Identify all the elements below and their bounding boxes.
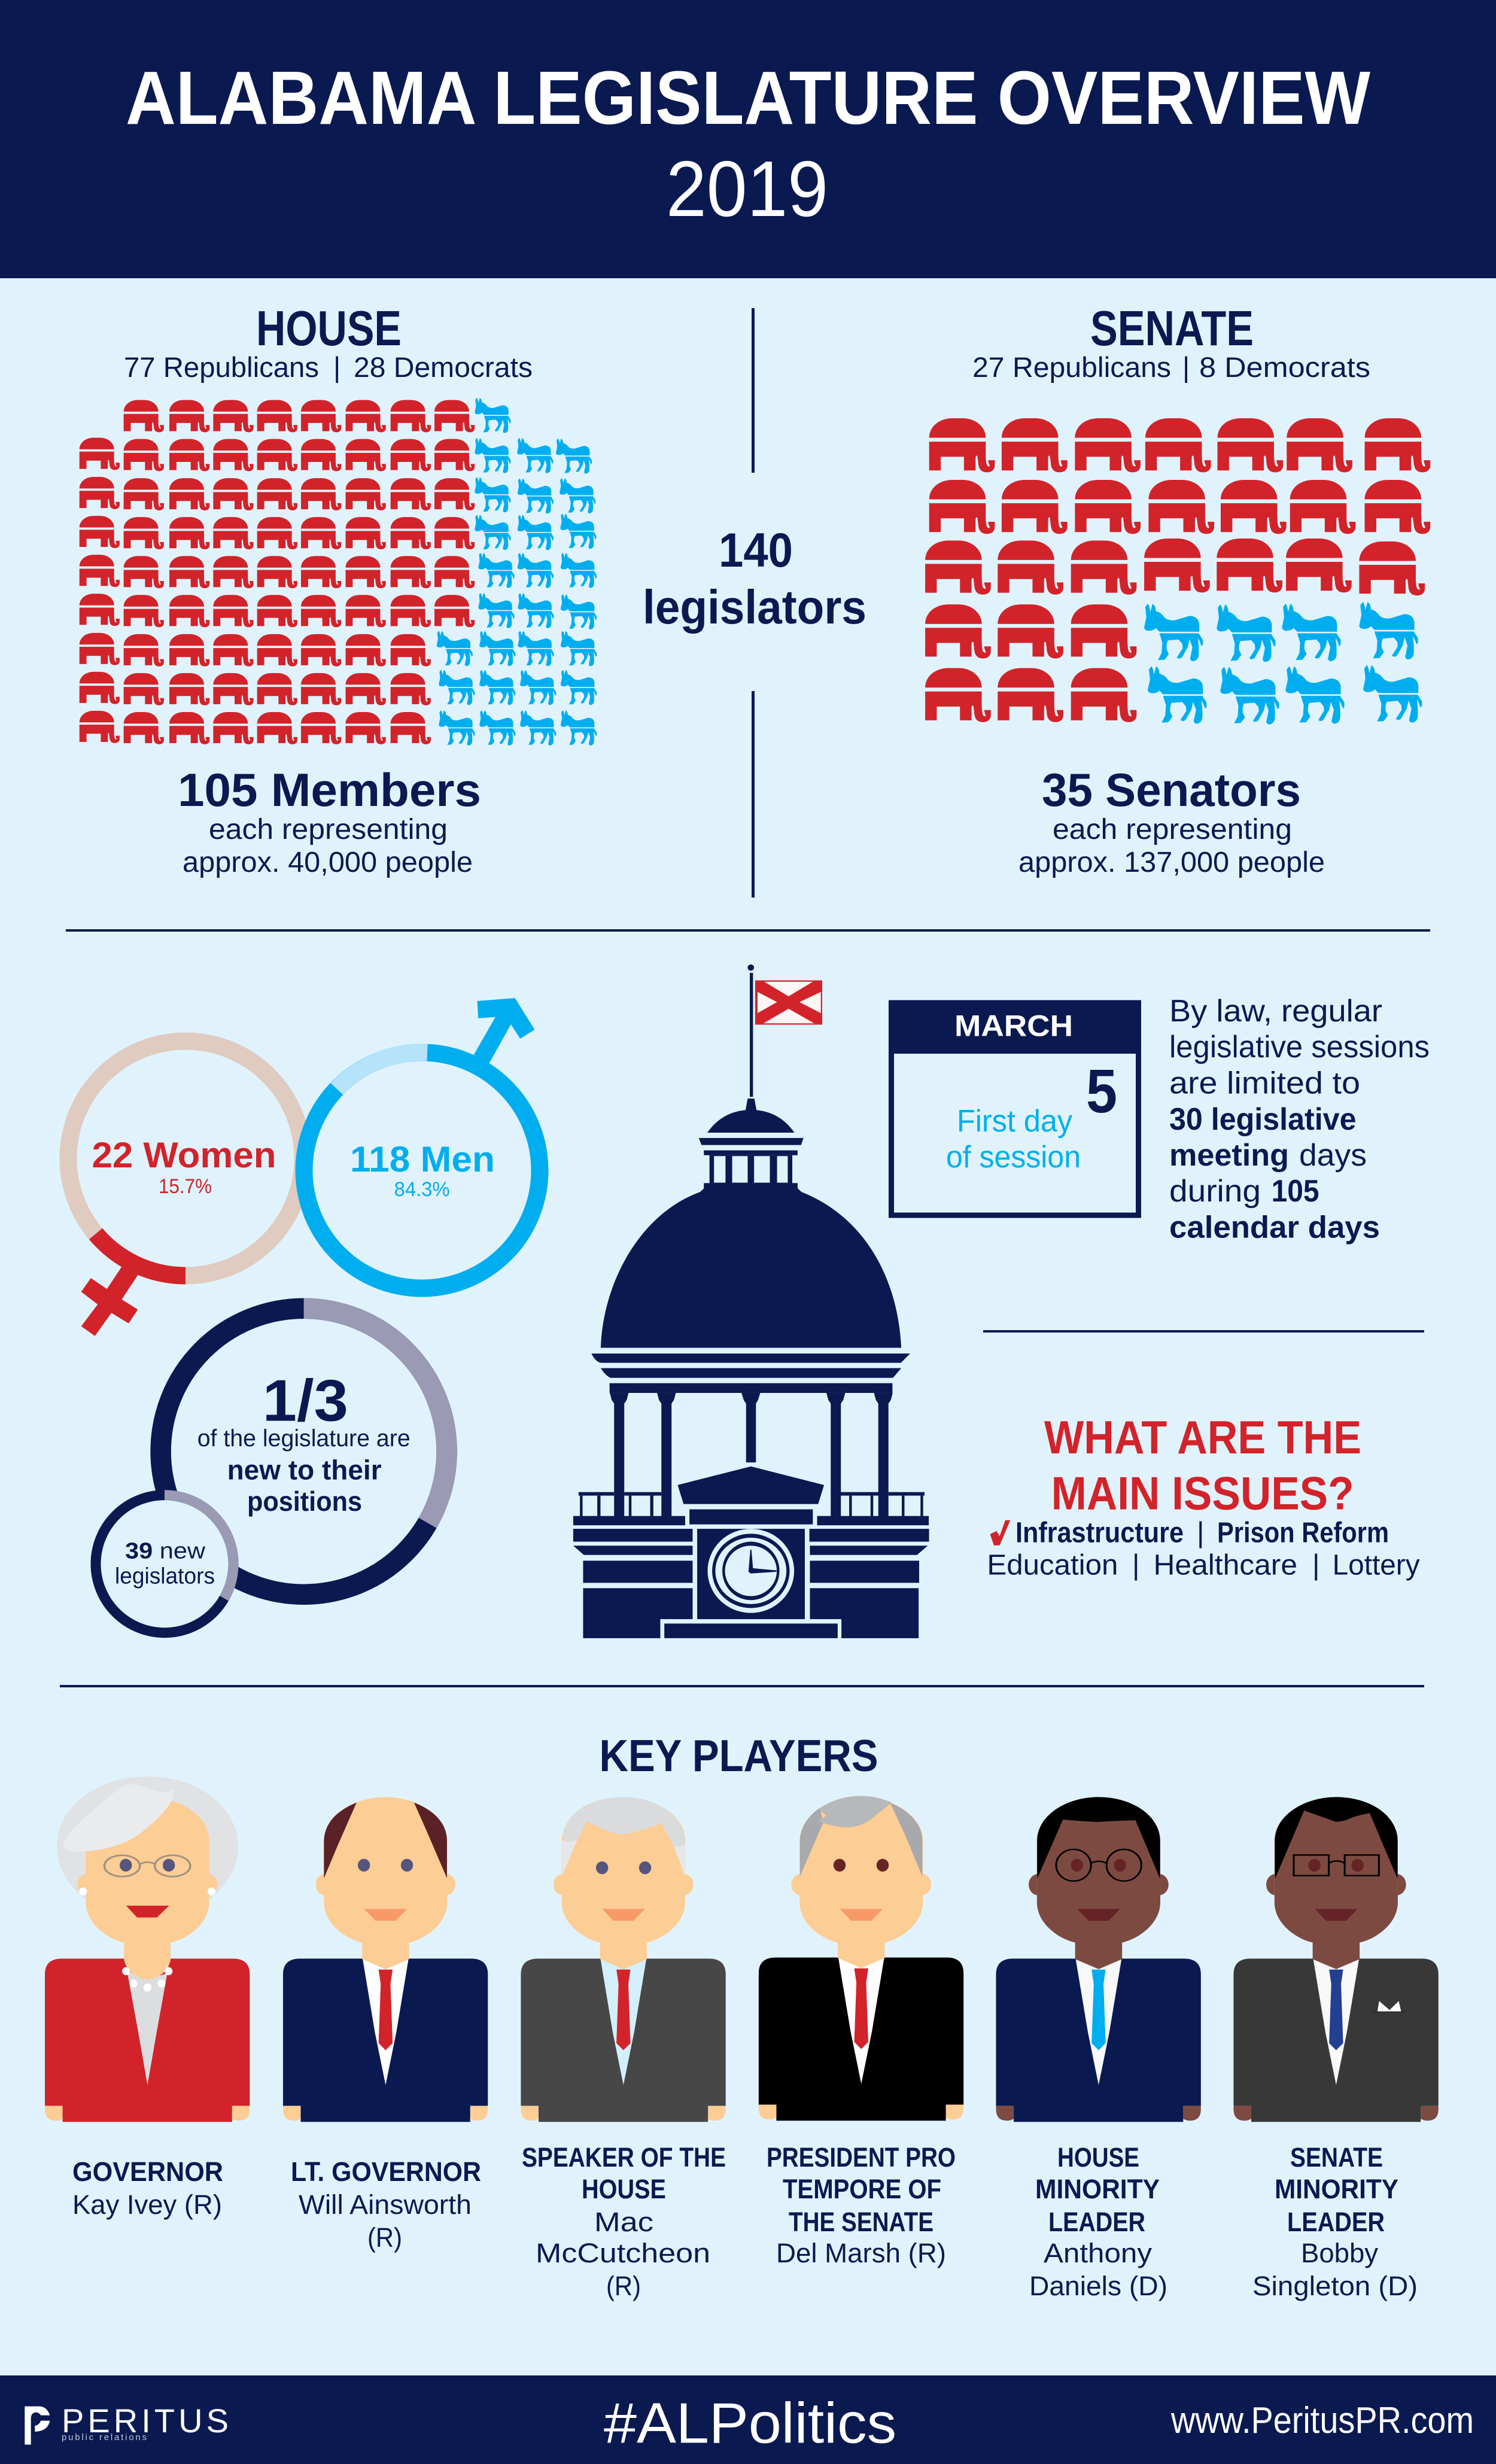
text: issues list: Prison Reform xyxy=(1217,1517,1389,1549)
year: 2019 xyxy=(666,145,828,233)
caption: lt governor: (R) xyxy=(367,2222,402,2253)
text: house members: approx. 40,000 people xyxy=(183,847,473,878)
caption: lt governor xyxy=(291,2156,481,2253)
text: one third new: of the legislature are xyxy=(197,1425,411,1452)
text: 39 new legislators xyxy=(115,1539,215,1589)
icon: capitol building xyxy=(573,965,929,1638)
caption: lt governor: Will Ainsworth xyxy=(299,2189,472,2220)
chart: men ring xyxy=(304,998,540,1288)
heading: main issues: WHAT ARE THE xyxy=(1044,1411,1361,1464)
text: session limits xyxy=(1169,994,1430,1245)
caption: speaker: SPEAKER OF THE xyxy=(522,2142,726,2173)
text: house members xyxy=(178,763,481,878)
panel: senate heading xyxy=(972,300,1370,383)
panel: house heading xyxy=(124,300,533,383)
text: session limits: during xyxy=(1169,1174,1261,1209)
text: house members: each representing xyxy=(209,814,448,845)
text: issues list: Healthcare xyxy=(1154,1550,1297,1581)
caption: house minority leader: Daniels (D) xyxy=(1029,2271,1167,2301)
caption: senate minority leader: LEADER xyxy=(1287,2207,1385,2237)
panel: house heading: HOUSE xyxy=(256,300,402,356)
caption: president pro tempore: Del Marsh (R) xyxy=(776,2238,946,2268)
figure: house minority leader anthony daniels xyxy=(996,1797,1201,2122)
text: session limits: By law, regular xyxy=(1169,994,1382,1029)
figure: president pro tempore del marsh xyxy=(759,1796,963,2121)
chart: one third ring xyxy=(161,1309,447,1595)
heading: key players: KEY PLAYERS xyxy=(600,1730,878,1781)
caption: governor: GOVERNOR xyxy=(72,2156,223,2187)
icon: female cross xyxy=(81,1267,138,1336)
text: date: 5 xyxy=(1086,1057,1117,1125)
caption: speaker xyxy=(522,2142,726,2301)
icon: peritus logo xyxy=(25,2407,50,2445)
text: session limits: legislative sessions xyxy=(1169,1030,1430,1064)
pictogram: house republicans xyxy=(80,400,475,744)
caption: speaker: HOUSE xyxy=(582,2174,666,2204)
text: first day of session: First day xyxy=(957,1104,1072,1139)
text: senators: 35 Senators xyxy=(1042,763,1301,816)
text: issues list: | xyxy=(1312,1550,1319,1581)
text: session limits: 30 legislative xyxy=(1169,1102,1356,1137)
caption: house minority leader: HOUSE xyxy=(1057,2142,1139,2173)
text: session limits: calendar days xyxy=(1169,1210,1380,1245)
pictogram: senate republicans xyxy=(925,418,1430,722)
figure: lt governor will ainsworth xyxy=(283,1797,488,2122)
caption: senate minority leader: SENATE xyxy=(1290,2142,1383,2173)
caption: senate minority leader: Bobby xyxy=(1301,2238,1378,2268)
text: session limits: are limited to xyxy=(1169,1066,1360,1101)
text: men count: 84.3% xyxy=(394,1178,450,1201)
caption: president pro tempore: THE SENATE xyxy=(789,2207,934,2237)
caption: governor: Kay Ivey (R) xyxy=(72,2189,222,2220)
panel: senate heading: 27 Republicans xyxy=(972,351,1171,383)
text: women count xyxy=(92,1135,276,1198)
caption: house minority leader: LEADER xyxy=(1048,2207,1145,2237)
text: issues list xyxy=(987,1517,1420,1581)
text: one third new: new to their xyxy=(227,1455,382,1486)
text: women count: 22 Women xyxy=(92,1135,276,1175)
title: ALABAMA LEGISLATURE OVERVIEW xyxy=(126,56,1370,140)
panel: house heading: | xyxy=(333,351,340,383)
icon: alabama flag xyxy=(755,980,822,1024)
caption: senate minority leader xyxy=(1252,2142,1418,2301)
caption: speaker: McCutcheon xyxy=(536,2238,710,2268)
text: session limits: meeting xyxy=(1169,1138,1289,1173)
caption: governor xyxy=(72,2156,223,2220)
text: hashtag: #ALPolitics xyxy=(604,2391,896,2456)
text: first day of session: of session xyxy=(946,1140,1081,1175)
text: senators: approx. 137,000 people xyxy=(1018,847,1325,878)
text: session limits: days xyxy=(1299,1138,1367,1173)
text: 39 new legislators: 39 new xyxy=(125,1539,206,1564)
text: 140 legislators: 140 xyxy=(719,524,793,577)
text: men count xyxy=(350,1139,495,1201)
caption: senate minority leader: MINORITY xyxy=(1275,2174,1398,2204)
text: senators xyxy=(1018,763,1325,878)
caption: house minority leader xyxy=(1029,2142,1167,2301)
caption: speaker: Mac xyxy=(594,2207,653,2237)
text: month: MARCH xyxy=(954,1009,1073,1043)
text: peritus: PERITUS xyxy=(62,2402,229,2439)
panel: house heading: 28 Democrats xyxy=(354,351,533,383)
caption: house minority leader: MINORITY xyxy=(1035,2174,1160,2204)
text: men count: 118 Men xyxy=(350,1139,495,1179)
caption: house minority leader: Anthony xyxy=(1044,2238,1153,2268)
figure: senate minority leader bobby singleton xyxy=(1233,1797,1439,2122)
panel: senate heading: 8 Democrats xyxy=(1199,351,1370,383)
icon: check mark xyxy=(990,1520,1010,1546)
text: issues list: | xyxy=(1197,1517,1204,1549)
chart: women ring xyxy=(68,1041,303,1336)
pictogram: house democrats xyxy=(437,398,597,746)
chart: new legislators small ring xyxy=(96,1495,233,1633)
figure: governor kay ivey xyxy=(45,1776,250,2122)
text: one third new: positions xyxy=(247,1486,362,1517)
pictogram: senate democrats xyxy=(1144,602,1422,725)
text: one third new: 1/3 xyxy=(263,1368,348,1434)
caption: president pro tempore xyxy=(767,2142,956,2268)
caption: speaker: (R) xyxy=(606,2271,641,2301)
caption: president pro tempore: PRESIDENT PRO xyxy=(767,2142,956,2173)
text: issues list: | xyxy=(1132,1550,1139,1581)
icon: male arrow xyxy=(474,998,534,1063)
text: women count: 15.7% xyxy=(159,1175,212,1198)
text: first day of session xyxy=(946,1104,1081,1175)
panel: senate heading: SENATE xyxy=(1090,300,1254,356)
panel: house heading: 77 Republicans xyxy=(124,351,319,383)
text: issues list: Infrastructure xyxy=(1015,1517,1184,1549)
caption: lt governor: LT. GOVERNOR xyxy=(291,2156,481,2187)
footer band xyxy=(0,2375,1496,2464)
text: one third new xyxy=(197,1368,411,1517)
panel: senate heading: | xyxy=(1182,351,1190,383)
text: public relations: public relations xyxy=(62,2432,147,2442)
caption: senate minority leader: Singleton (D) xyxy=(1252,2271,1418,2301)
text: senators: each representing xyxy=(1053,814,1292,845)
text: session limits: 105 xyxy=(1272,1174,1319,1209)
figure: speaker mac mccutcheon xyxy=(521,1797,726,2122)
text: 140 legislators xyxy=(643,524,866,634)
caption: president pro tempore: TEMPORE OF xyxy=(783,2174,941,2204)
heading: main issues: MAIN ISSUES? xyxy=(1051,1467,1354,1520)
text: issues list: Lottery xyxy=(1333,1550,1420,1581)
text: house members: 105 Members xyxy=(178,763,481,816)
header band xyxy=(0,0,1496,278)
text: 39 new legislators: legislators xyxy=(115,1564,215,1589)
text: issues list: Education xyxy=(987,1550,1118,1581)
heading: main issues xyxy=(1044,1411,1361,1520)
text: 140 legislators: legislators xyxy=(643,580,866,634)
panel: calendar xyxy=(889,1000,1141,1215)
